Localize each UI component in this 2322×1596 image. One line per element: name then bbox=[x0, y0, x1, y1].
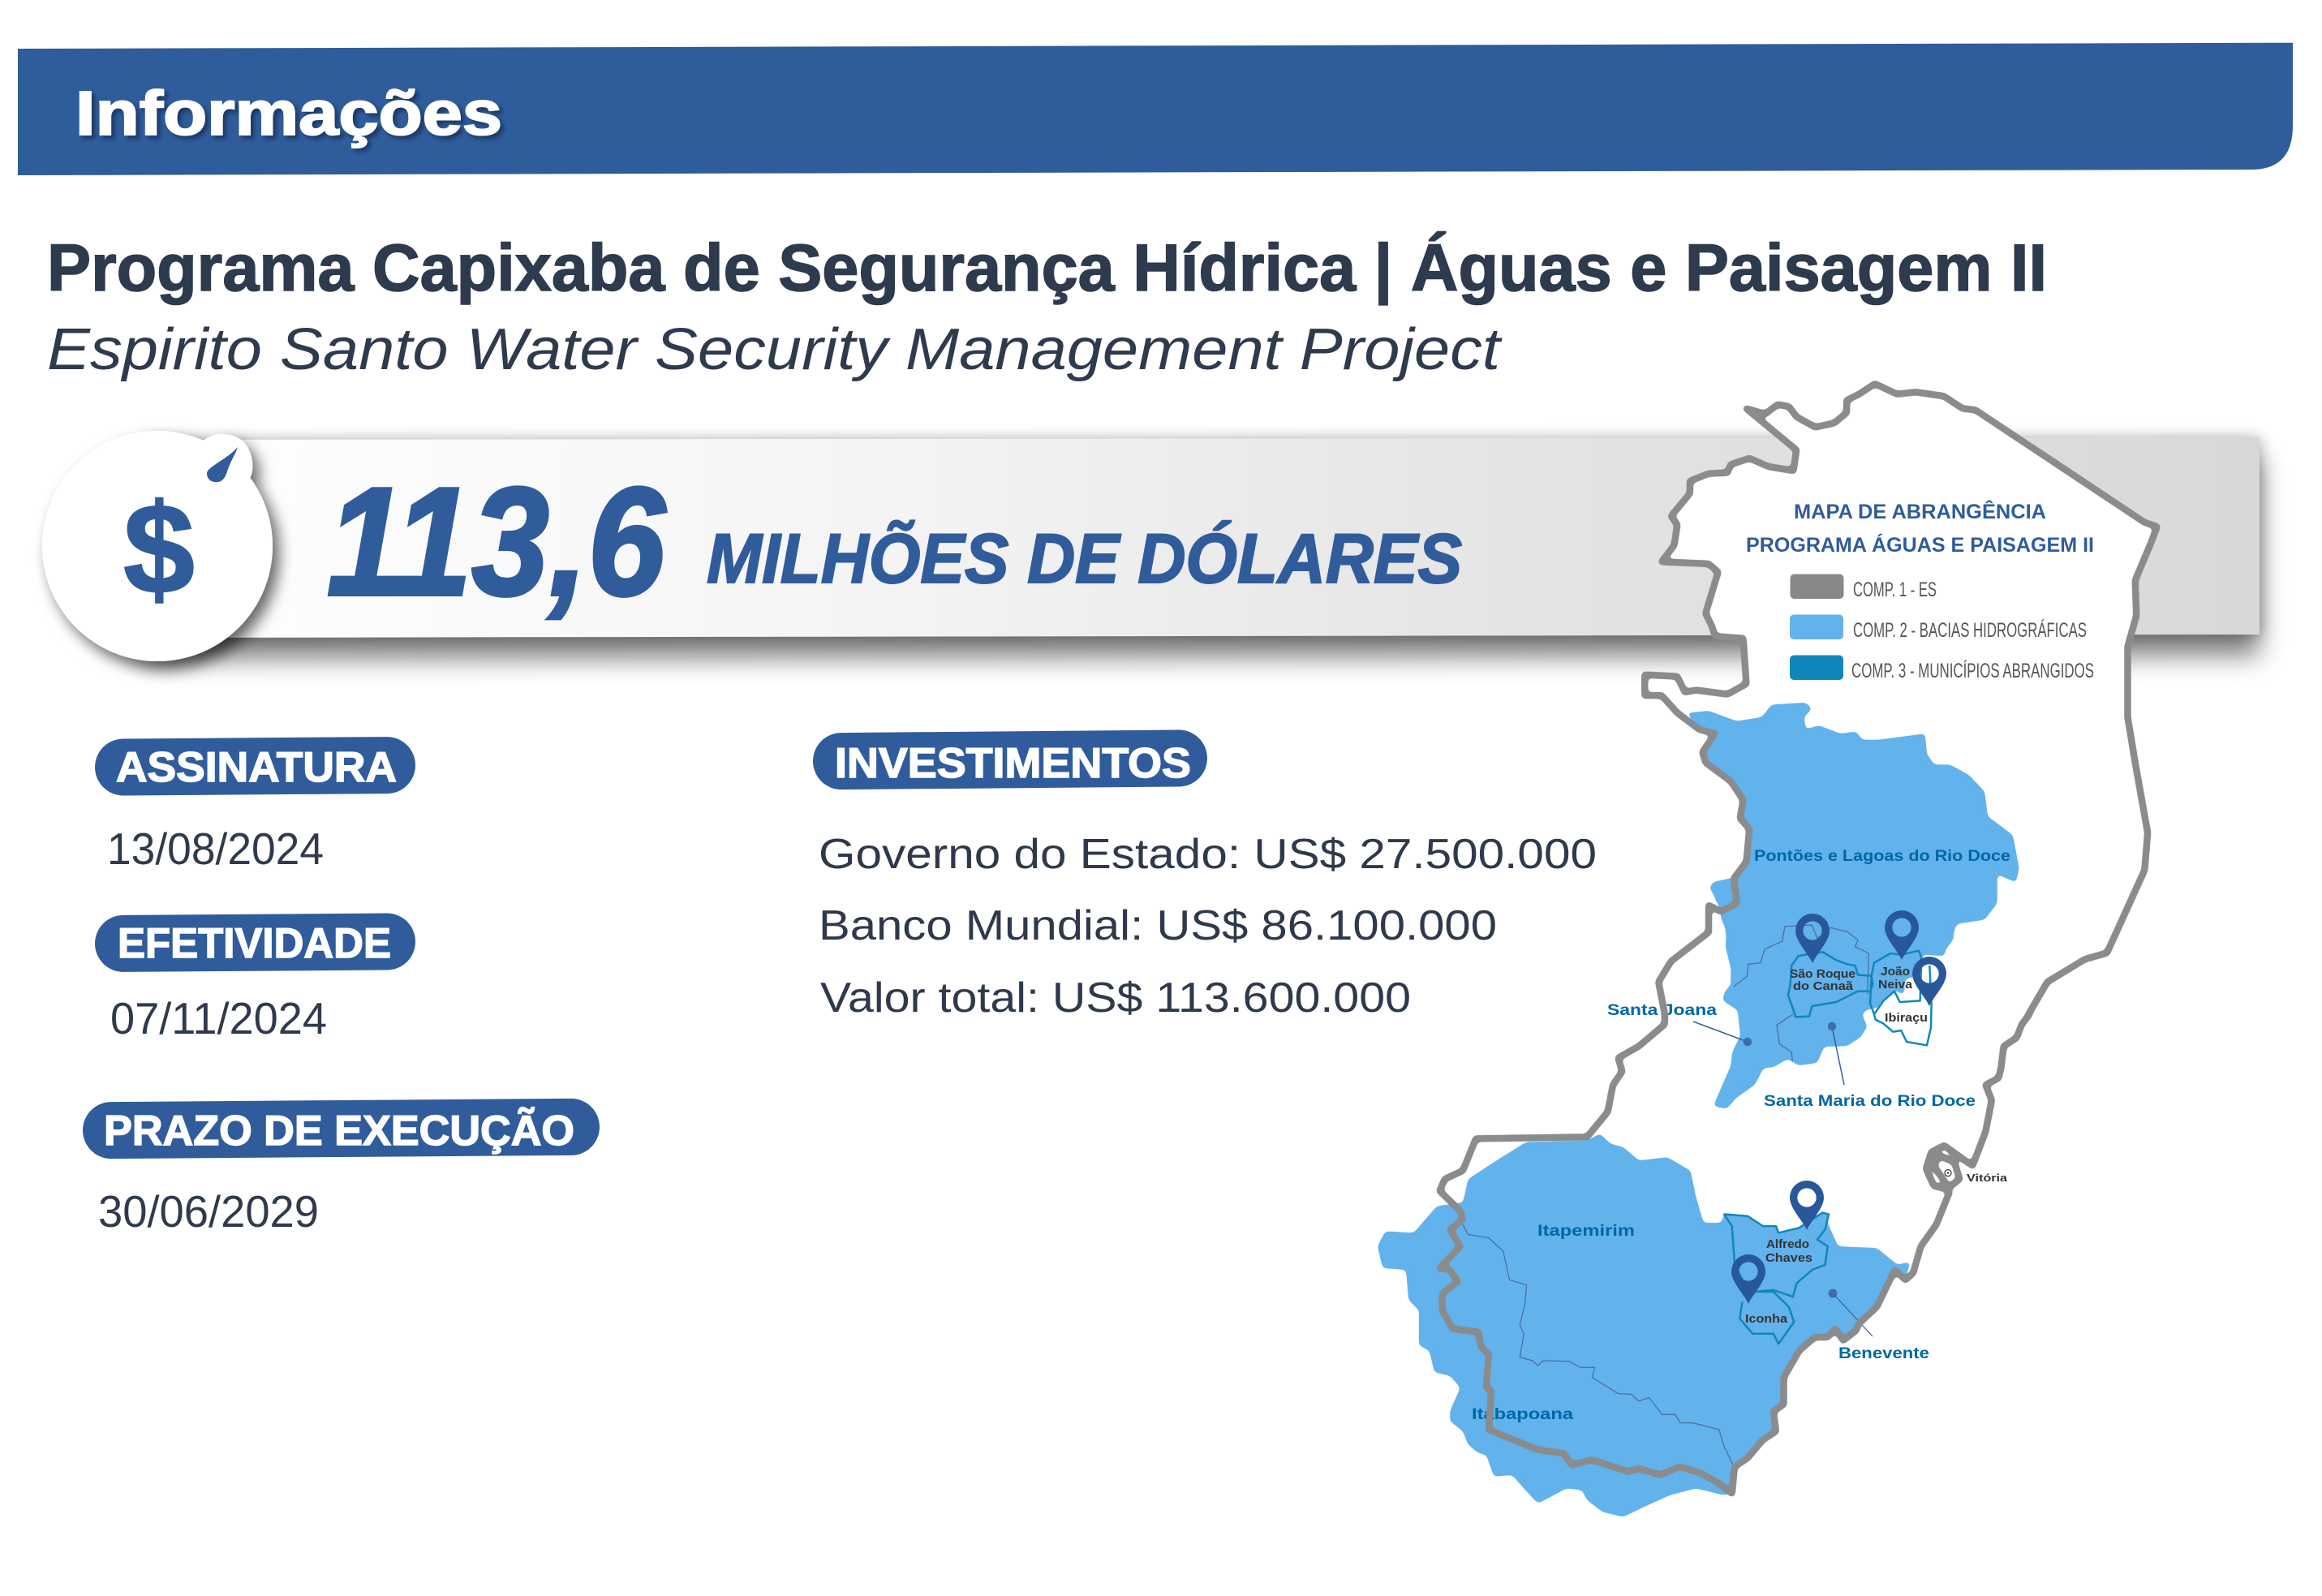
effectiveness pill bbox=[95, 913, 415, 972]
map title: PROGRAMA ÁGUAS E PAISAGEM II bbox=[1746, 533, 2094, 557]
icon: pin Alfredo Chaves bbox=[1790, 1181, 1824, 1230]
icon: coin with droplet bbox=[42, 431, 273, 661]
icon: Vitória marker bbox=[1945, 1170, 1951, 1177]
map: municipality labels bbox=[1745, 965, 2008, 1326]
investments pill: INVESTIMENTOS bbox=[835, 740, 1191, 787]
map: river basins bbox=[1378, 703, 2019, 1517]
map: basin labels: Santa Maria do Rio Doce bbox=[1764, 1093, 1976, 1110]
effectiveness pill: EFETIVIDADE bbox=[118, 920, 391, 967]
map: basin labels: Pontões e Lagoas do Rio Doce bbox=[1754, 848, 2010, 865]
icon: pin Iconha bbox=[1731, 1254, 1765, 1304]
map: municipality labels: do Canaã bbox=[1793, 979, 1854, 993]
map: municipality labels: Vitória bbox=[1967, 1172, 2008, 1184]
investments list: Governo do Estado: US$ 27.500.000 bbox=[819, 831, 1597, 878]
icon: pin São Roque do Canaã bbox=[1795, 914, 1830, 963]
investments pill bbox=[813, 729, 1207, 789]
map title bbox=[1746, 499, 2094, 557]
map: basin divide lines bbox=[1463, 925, 1868, 1465]
map: municipality labels: Ibiraçu bbox=[1885, 1011, 1928, 1025]
map legend: COMP. 2 - BACIAS HIDROGRÁFICAS bbox=[1853, 618, 2087, 642]
header bar bbox=[18, 43, 2293, 175]
map: municipality labels: Chaves bbox=[1765, 1251, 1812, 1265]
investments list bbox=[819, 831, 1597, 1022]
map: municipality labels: São Roque bbox=[1790, 967, 1855, 981]
program subtitle: Espirito Santo Water Security Management Project bbox=[47, 317, 1503, 382]
icon: coin with droplet: $ bbox=[123, 478, 195, 621]
state interior fill bbox=[1645, 384, 2157, 781]
investments list: Banco Mundial: US$ 86.100.000 bbox=[819, 902, 1497, 949]
map: basin labels: Benevente bbox=[1838, 1345, 1929, 1362]
map title: MAPA DE ABRANGÊNCIA bbox=[1794, 499, 2046, 523]
header title: Informações bbox=[75, 79, 502, 148]
amount unit: MILHÕES DE DÓLARES bbox=[707, 520, 1462, 598]
map: municipality labels: Alfredo bbox=[1766, 1237, 1809, 1251]
map: basin labels: Santa Joana bbox=[1607, 1002, 1718, 1019]
investments list: Valor total: US$ 113.600.000 bbox=[820, 974, 1411, 1022]
map legend: COMP. 1 - ES bbox=[1853, 579, 1937, 601]
amount value: 113,6 bbox=[327, 456, 666, 628]
signature pill bbox=[95, 737, 415, 796]
map: municipality labels: Neiva bbox=[1878, 978, 1913, 992]
deadline date: 30/06/2029 bbox=[98, 1186, 319, 1237]
signature date: 13/08/2024 bbox=[107, 824, 324, 874]
map: basin labels: Itapemirim bbox=[1537, 1223, 1635, 1240]
icon: pin Ibiraçu bbox=[1912, 957, 1946, 1006]
map: leader lines and dots bbox=[1693, 1022, 1873, 1336]
map: basin labels: Itabapoana bbox=[1472, 1406, 1574, 1423]
deadline pill: PRAZO DE EXECUÇÃO bbox=[104, 1107, 574, 1155]
map: municipality labels: João bbox=[1881, 965, 1910, 979]
effectiveness date: 07/11/2024 bbox=[110, 993, 327, 1043]
map: municipality labels: Iconha bbox=[1745, 1312, 1788, 1326]
signature pill: ASSINATURA bbox=[116, 744, 397, 791]
map: municipalities bbox=[1724, 951, 1932, 1344]
value banner bbox=[146, 437, 2260, 659]
icon: pin João Neiva bbox=[1885, 910, 1919, 960]
map: basin labels bbox=[1472, 848, 2010, 1423]
map: state outline bbox=[1439, 384, 2157, 1494]
map legend bbox=[1790, 574, 2094, 682]
map legend: COMP. 3 - MUNICÍPIOS ABRANGIDOS bbox=[1851, 659, 2094, 682]
program title: Programa Capixaba de Segurança Hídrica | Águas e Paisagem II bbox=[47, 231, 2047, 306]
